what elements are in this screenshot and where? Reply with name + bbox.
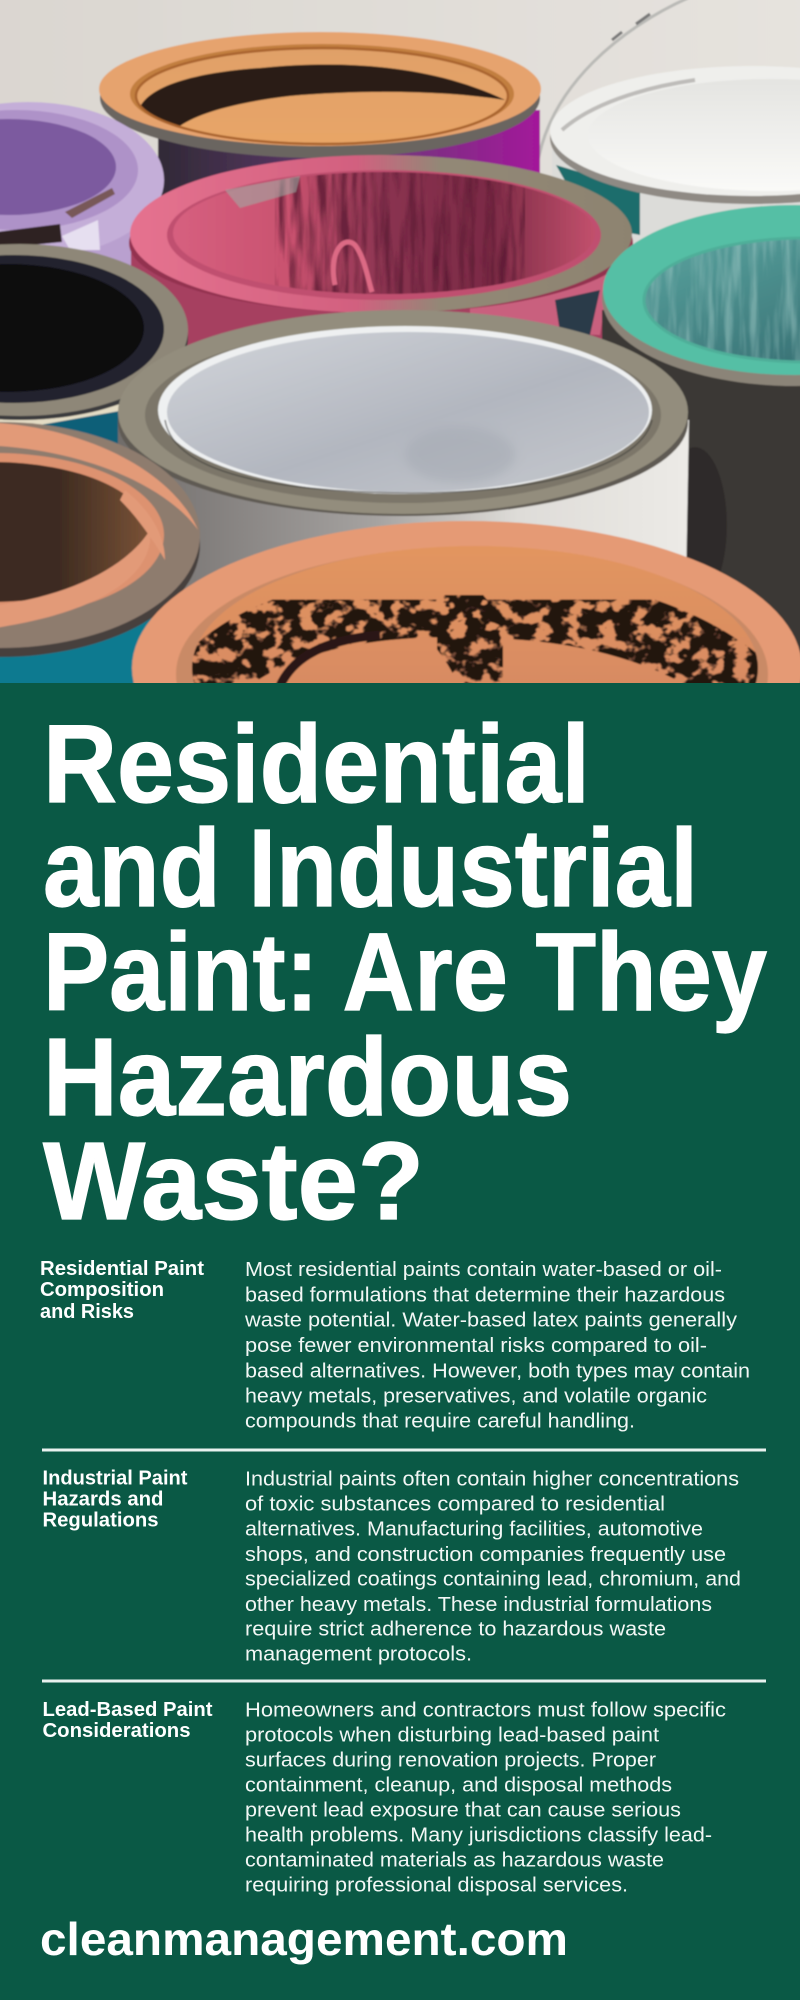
- paint can: orange: [99, 32, 541, 200]
- heading: industrial paint hazards: [42, 1468, 188, 1532]
- heading: industrial paint hazards: Regulations: [42, 1510, 158, 1532]
- icon: wire paint-can handle: [537, 0, 688, 168]
- paint can: teal: [602, 205, 800, 700]
- text: lead-based paint body: health problems. Many jurisdictions classify lead-: [245, 1824, 712, 1846]
- text: residential paint body: Most residential paints contain water-based or oil-: [245, 1259, 722, 1281]
- text: lead-based paint body: Homeowners and contractors must follow specific: [245, 1700, 726, 1722]
- heading: industrial paint hazards: Industrial Paint: [42, 1468, 188, 1490]
- text: lead-based paint body: containment, cleanup, and disposal methods: [245, 1774, 672, 1796]
- title: [43, 703, 767, 1243]
- text: lead-based paint body: protocols when disturbing lead-based paint: [245, 1724, 659, 1746]
- text: residential paint body: pose fewer environmental risks compared to oil-: [245, 1335, 707, 1357]
- heading: residential paint composition: [40, 1258, 204, 1323]
- section: industrial paint: [42, 1468, 741, 1666]
- paint can: grey: [116, 310, 690, 590]
- text: residential paint body: heavy metals, preservatives, and volatile organic: [245, 1386, 707, 1408]
- heading: lead-based paint considerations: Considerations: [42, 1720, 190, 1742]
- text: residential paint body: based formulations that determine their hazardous: [245, 1284, 725, 1306]
- paint can: pink: [128, 154, 634, 346]
- paint can: purple: [0, 102, 164, 275]
- text: industrial paint body: specialized coatings containing lead, chromium, and: [245, 1568, 741, 1590]
- section: lead-based paint: [42, 1699, 726, 1896]
- text: industrial paint body: other heavy metals. These industrial formulations: [245, 1594, 712, 1616]
- heading: lead-based paint considerations: Lead-Based Paint: [42, 1699, 213, 1721]
- paint can: black: [0, 244, 188, 445]
- text: lead-based paint body: requiring professional disposal services.: [245, 1874, 628, 1896]
- text: residential paint body: [244, 1259, 750, 1432]
- section: residential paint: [40, 1258, 750, 1432]
- heading: residential paint composition: Composition: [40, 1279, 164, 1301]
- paint can: white: [549, 66, 800, 236]
- text: industrial paint body: of toxic substances compared to residential: [245, 1494, 665, 1516]
- title: Residential: [43, 703, 590, 826]
- text: industrial paint body: [245, 1468, 741, 1666]
- heading: lead-based paint considerations: [42, 1699, 213, 1742]
- text: lead-based paint body: [245, 1700, 726, 1896]
- footer: website url: cleanmanagement.com: [40, 1913, 568, 1965]
- title: Hazardous: [43, 1016, 572, 1139]
- paint can: salmon: [0, 422, 200, 700]
- text: lead-based paint body: surfaces during renovation projects. Proper: [245, 1750, 656, 1772]
- text: industrial paint body: Industrial paints often contain higher concentrations: [245, 1468, 739, 1490]
- text: residential paint body: based alternatives. However, both types may contain: [245, 1360, 750, 1382]
- text: residential paint body: compounds that require careful handling.: [245, 1410, 635, 1432]
- text: industrial paint body: shops, and construction companies frequently use: [245, 1544, 726, 1566]
- photo: open paint cans: [0, 0, 800, 683]
- text: industrial paint body: alternatives. Manufacturing facilities, automotive: [245, 1518, 703, 1540]
- text: lead-based paint body: contaminated materials as hazardous waste: [245, 1850, 664, 1872]
- text: residential paint body: waste potential. Water-based latex paints generally: [244, 1310, 737, 1332]
- heading: residential paint composition: and Risks: [40, 1301, 134, 1323]
- heading: residential paint composition: Residential Paint: [40, 1258, 204, 1280]
- text: industrial paint body: management protocols.: [245, 1644, 472, 1666]
- title: and Industrial: [43, 807, 698, 930]
- paint can: orange foreground: [130, 520, 800, 683]
- text: industrial paint body: require strict adherence to hazardous waste: [245, 1618, 666, 1640]
- title: Waste?: [43, 1120, 424, 1243]
- heading: industrial paint hazards: Hazards and: [42, 1488, 164, 1510]
- text: lead-based paint body: prevent lead exposure that can cause serious: [245, 1800, 681, 1822]
